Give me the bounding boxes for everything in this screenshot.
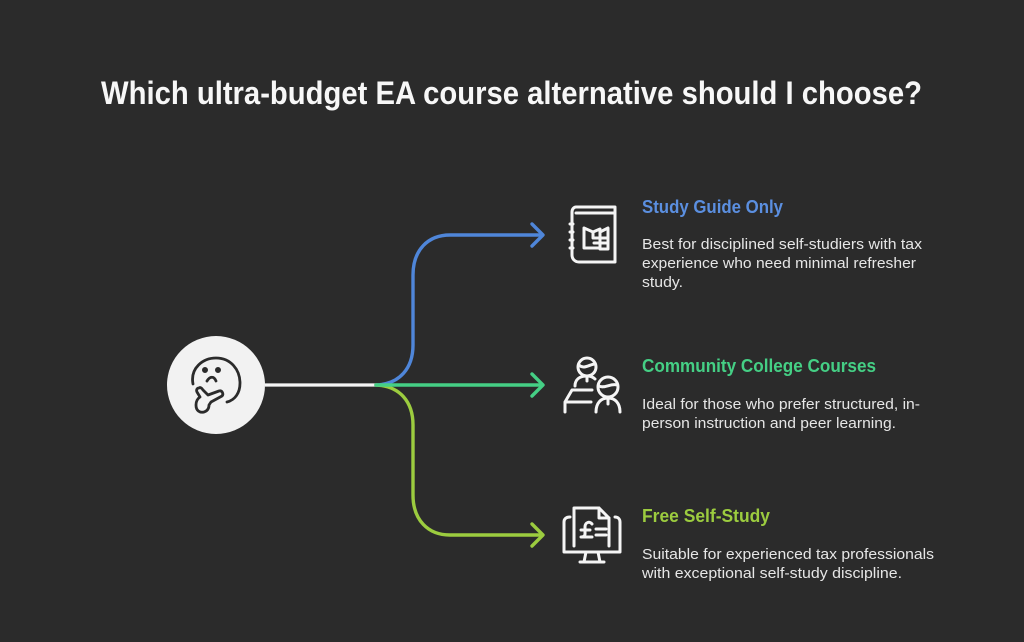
description: person instruction and peer learning. [642, 415, 896, 432]
description: study. [642, 274, 683, 291]
icon: free self-study pound document on monitor [564, 508, 620, 562]
central thinking icon [167, 336, 265, 434]
description: Best for disciplined self-studiers with tax [642, 236, 922, 253]
connector: trunk line [265, 383, 376, 387]
icon: study guide book [570, 207, 615, 262]
description: with exceptional self-study discipline. [641, 565, 902, 582]
option 3: Free Self-Study [641, 506, 934, 582]
option 2: Community College Courses [642, 356, 920, 432]
arrow: to Community College Courses [376, 374, 543, 396]
heading: Study Guide Only [642, 197, 783, 217]
heading: Free Self-Study [642, 506, 770, 526]
arrow: to Free Self-Study [376, 385, 543, 546]
heading: Community College Courses [642, 356, 876, 376]
description: experience who need minimal refresher [642, 255, 916, 272]
icon: community college instructor and student [565, 358, 620, 412]
description [642, 396, 920, 432]
arrow: to Study Guide Only [376, 224, 543, 385]
description [641, 546, 934, 582]
description: Ideal for those who prefer structured, in- [642, 396, 920, 413]
title: Which ultra-budget EA course alternative should I choose? [101, 75, 922, 111]
description [642, 236, 922, 291]
option 1: Study Guide Only [642, 197, 922, 291]
description: Suitable for experienced tax professionals [642, 546, 934, 563]
